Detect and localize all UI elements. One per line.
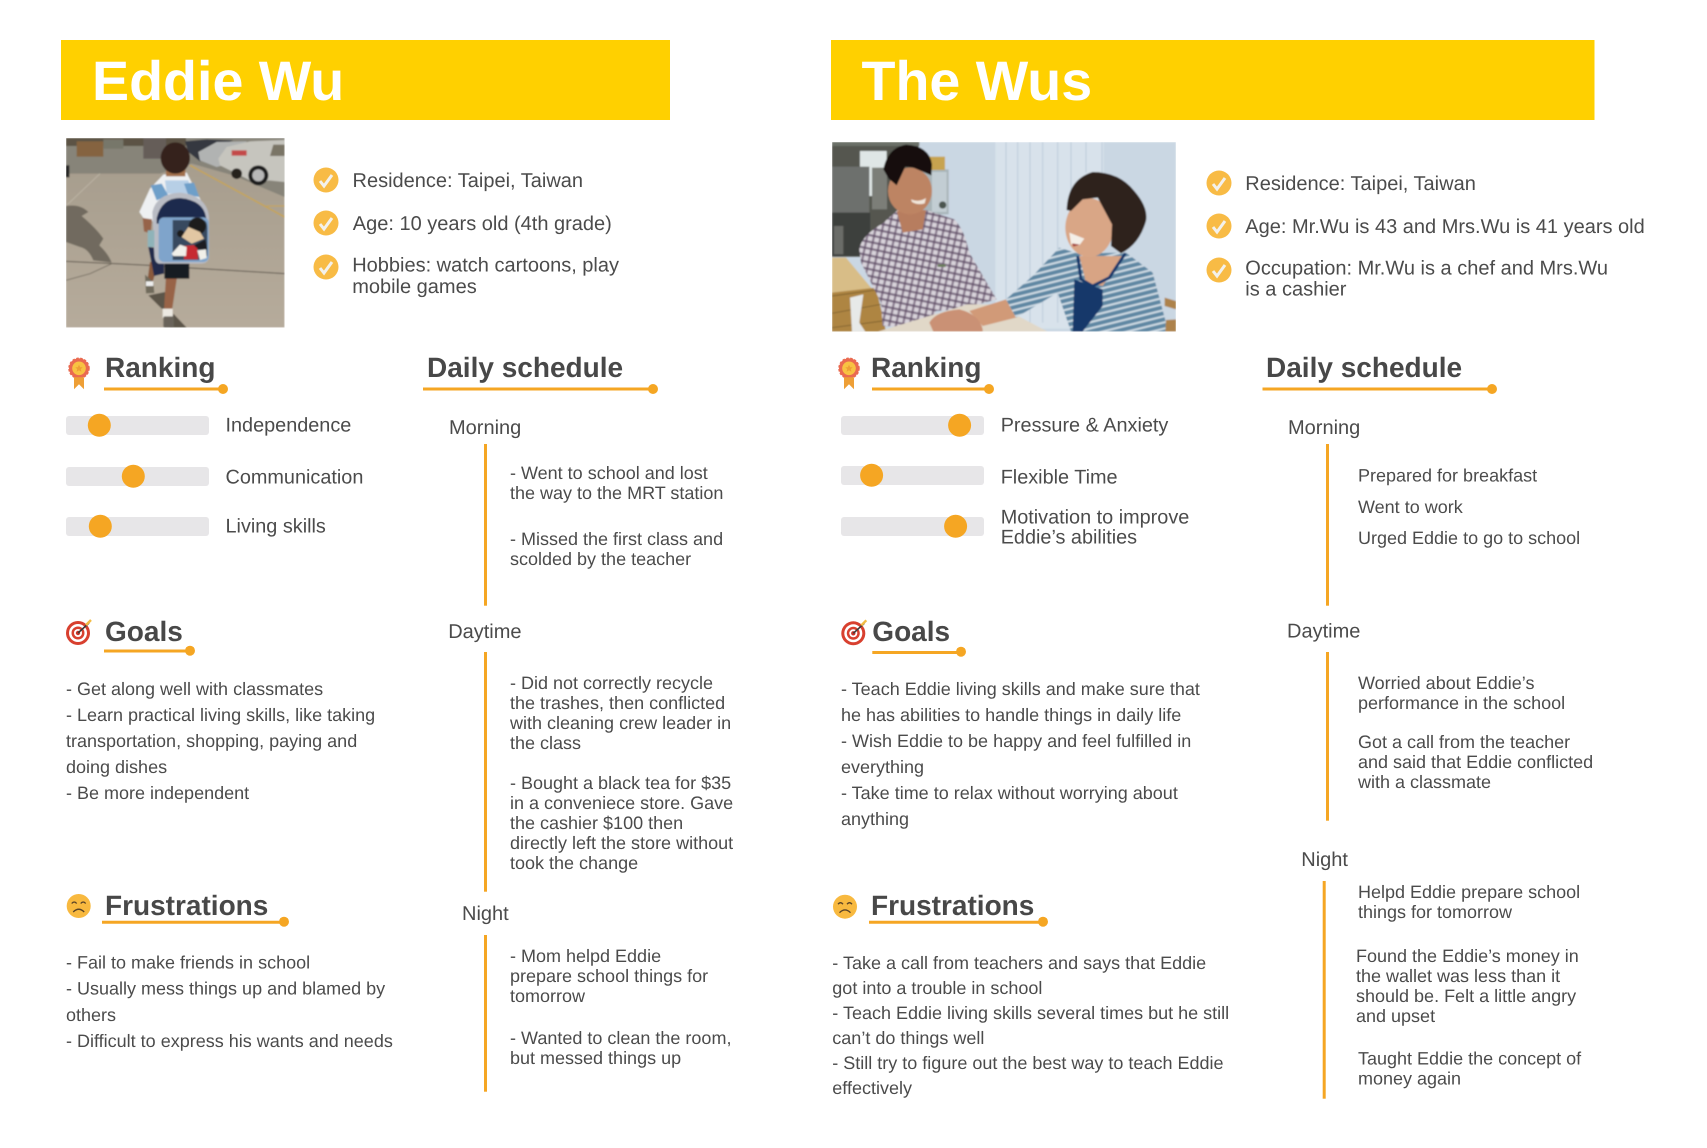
- heading: Daily schedule: [1262, 352, 1497, 394]
- timeline: morning: Urged Eddie to go to school: [1358, 528, 1580, 548]
- timeline: morning: Went to work: [1358, 497, 1464, 517]
- text: The Wus goals list: - Wish Eddie to be happy and feel fulfilled in: [841, 731, 1191, 751]
- timeline: daytime: Got a call from the teacher: [1358, 732, 1570, 752]
- section: Eddie frustrations: [66, 890, 393, 1051]
- timeline: morning: scolded by the teacher: [510, 549, 691, 569]
- text: Eddie goals list: - Learn practical living skills, like taking: [66, 705, 375, 725]
- panel: The Wus persona: [831, 40, 1645, 1099]
- text: The Wus goals list: anything: [841, 809, 909, 829]
- slider: Communication: [66, 465, 363, 489]
- timeline: night: [1301, 849, 1582, 1099]
- item: hobbies: [314, 254, 619, 298]
- heading: Goals: [841, 616, 966, 657]
- item: hobbies: Hobbies: watch cartoons, play: [352, 254, 619, 276]
- text: The Wus frustrations list: effectively: [832, 1078, 912, 1098]
- heading: Frustrations: Frustrations: [871, 890, 1034, 921]
- timeline: daytime: and said that Eddie conflicted: [1358, 752, 1593, 772]
- timeline: daytime: with a classmate: [1357, 772, 1491, 792]
- section: The Wus ranking: [839, 352, 1189, 549]
- timeline: night: Night: [462, 903, 509, 925]
- text: The Wus frustrations list: - Teach Eddie living skills several times but he still: [832, 1003, 1229, 1023]
- item: residence: Residence: Taipei, Taiwan: [1245, 173, 1476, 195]
- slider: Living skills: Living skills: [226, 516, 326, 538]
- photo: Eddie walking to school with backpack: [66, 138, 285, 328]
- timeline: morning: [449, 417, 723, 606]
- text: Eddie goals list: doing dishes: [66, 757, 167, 777]
- timeline: night: the wallet was less than it: [1356, 966, 1560, 986]
- timeline: daytime: the class: [510, 733, 581, 753]
- heading: Goals: [66, 616, 195, 656]
- timeline: daytime: in a conveniece store. Gave: [510, 793, 733, 813]
- text: The Wus goals list: - Take time to relax without worrying about: [841, 783, 1178, 803]
- timeline: morning: the way to the MRT station: [510, 483, 723, 503]
- item: occupation: Occupation: Mr.Wu is a chef and Mrs.Wu: [1245, 258, 1608, 280]
- title banner: The Wus: The Wus: [862, 50, 1092, 112]
- heading: Goals: Goals: [105, 616, 183, 647]
- heading: Ranking: Ranking: [871, 352, 981, 383]
- section: Eddie ranking: [66, 352, 363, 538]
- text: Eddie frustrations list: - Difficult to express his wants and needs: [66, 1031, 393, 1051]
- timeline: night: - Wanted to clean the room,: [510, 1028, 731, 1048]
- slider: Independence: [66, 414, 351, 437]
- timeline: night: things for tomorrow: [1358, 902, 1513, 922]
- timeline: night: Found the Eddie’s money in: [1356, 946, 1579, 966]
- slider: Motivation to improve: Motivation to improve: [1001, 507, 1189, 529]
- timeline: night: - Mom helpd Eddie: [510, 946, 661, 966]
- item: residence: Residence: Taipei, Taiwan: [352, 170, 583, 192]
- timeline: night: should be. Felt a little angry: [1356, 986, 1576, 1006]
- list: Eddie facts: [314, 168, 619, 298]
- section: Eddie daily schedule: [423, 352, 733, 1092]
- item: occupation: [1206, 258, 1608, 300]
- timeline: daytime: performance in the school: [1358, 693, 1565, 713]
- text: Eddie frustrations list: - Usually mess things up and blamed by: [66, 979, 385, 999]
- title banner: The Wus: [831, 40, 1594, 120]
- timeline: daytime: - Bought a black tea for $35: [510, 773, 731, 793]
- timeline: night: and upset: [1356, 1006, 1435, 1026]
- slider: Flexible Time: Flexible Time: [1001, 467, 1118, 489]
- timeline: daytime: [1287, 621, 1593, 821]
- heading: Ranking: Ranking: [105, 352, 215, 383]
- text: The Wus frustrations list: can’t do things well: [832, 1028, 984, 1048]
- timeline: daytime: Daytime: [1287, 621, 1360, 643]
- slider: Motivation to improve: Eddie’s abilities: [1001, 527, 1137, 549]
- timeline: morning: Morning: [449, 417, 521, 439]
- section: The Wus goals: [841, 616, 1200, 829]
- title banner: Eddie Wu: [61, 40, 670, 120]
- heading: Ranking: [839, 352, 994, 394]
- timeline: morning: - Missed the first class and: [510, 529, 723, 549]
- slider: Pressure and Anxiety: Pressure & Anxiety: [1001, 415, 1168, 437]
- item: hobbies: mobile games: [352, 276, 477, 298]
- text: The Wus frustrations list: - Still try to figure out the best way to teach Eddie: [832, 1053, 1224, 1073]
- heading: Daily schedule: Daily schedule: [1266, 352, 1462, 383]
- timeline: daytime: with cleaning crew leader in: [509, 713, 731, 733]
- timeline: daytime: - Did not correctly recycle: [510, 673, 713, 693]
- heading: Goals: Goals: [872, 616, 950, 647]
- text: The Wus frustrations list: got into a trouble in school: [832, 978, 1042, 998]
- section: The Wus daily schedule: [1262, 352, 1593, 1099]
- text: Eddie frustrations list: others: [66, 1005, 116, 1025]
- timeline: daytime: the trashes, then conflicted: [510, 693, 725, 713]
- timeline: night: tomorrow: [510, 986, 586, 1006]
- photo: Mr and Mrs Wu laughing together: [832, 142, 1176, 332]
- heading: Daily schedule: Daily schedule: [427, 352, 623, 383]
- timeline: night: [462, 903, 731, 1092]
- timeline: night: prepare school things for: [510, 966, 708, 986]
- text: The Wus goals list: he has abilities to handle things in daily life: [841, 705, 1181, 725]
- title banner: Eddie Wu: Eddie Wu: [92, 50, 344, 112]
- text: The Wus goals list: everything: [841, 757, 924, 777]
- timeline: morning: Morning: [1288, 417, 1360, 439]
- text: Eddie frustrations list: - Fail to make friends in school: [66, 952, 310, 972]
- heading: Ranking: [69, 352, 228, 394]
- slider: Living skills: [66, 515, 326, 538]
- timeline: daytime: the cashier $100 then: [510, 813, 683, 833]
- heading: Frustrations: Frustrations: [105, 890, 268, 921]
- timeline: night: Night: [1301, 849, 1348, 871]
- text: Eddie goals list: - Get along well with classmates: [66, 679, 323, 699]
- panel: Eddie Wu persona: [61, 40, 733, 1092]
- heading: Frustrations: [67, 890, 289, 927]
- text: The Wus goals list: - Teach Eddie living skills and make sure that: [841, 679, 1200, 699]
- slider: Independence: Independence: [226, 415, 351, 437]
- timeline: daytime: took the change: [510, 853, 638, 873]
- text: Eddie goals list: transportation, shopping, paying and: [66, 731, 357, 751]
- heading: Daily schedule: [423, 352, 658, 394]
- section: The Wus frustrations: [832, 890, 1229, 1098]
- timeline: daytime: [448, 621, 733, 892]
- slider: Motivation to improve: [841, 507, 1189, 549]
- heading: Frustrations: [833, 890, 1048, 927]
- text: Eddie goals list: - Be more independent: [66, 783, 249, 803]
- timeline: night: Taught Eddie the concept of: [1358, 1049, 1582, 1069]
- section: Eddie goals: [66, 616, 375, 803]
- timeline: morning: Prepared for breakfast: [1358, 466, 1537, 486]
- timeline: night: Helpd Eddie prepare school: [1358, 882, 1580, 902]
- item: age: Age: Mr.Wu is 43 and Mrs.Wu is 41 years old: [1245, 216, 1645, 238]
- timeline: daytime: Daytime: [448, 621, 522, 643]
- slider: Flexible Time: [841, 464, 1118, 489]
- text: The Wus frustrations list: - Take a call from teachers and says that Eddie: [832, 953, 1206, 973]
- timeline: night: but messed things up: [510, 1048, 681, 1068]
- list: The Wus facts: [1206, 170, 1645, 300]
- timeline: daytime: Worried about Eddie’s: [1358, 673, 1534, 693]
- timeline: morning: [1288, 417, 1580, 606]
- slider: Pressure and Anxiety: [841, 414, 1168, 437]
- slider: Communication: Communication: [226, 467, 363, 489]
- item: age: Age: 10 years old (4th grade): [353, 213, 612, 235]
- timeline: daytime: directly left the store without: [510, 833, 733, 853]
- item: occupation: is a cashier: [1245, 278, 1347, 300]
- timeline: night: money again: [1358, 1069, 1461, 1089]
- timeline: morning: - Went to school and lost: [510, 463, 708, 483]
